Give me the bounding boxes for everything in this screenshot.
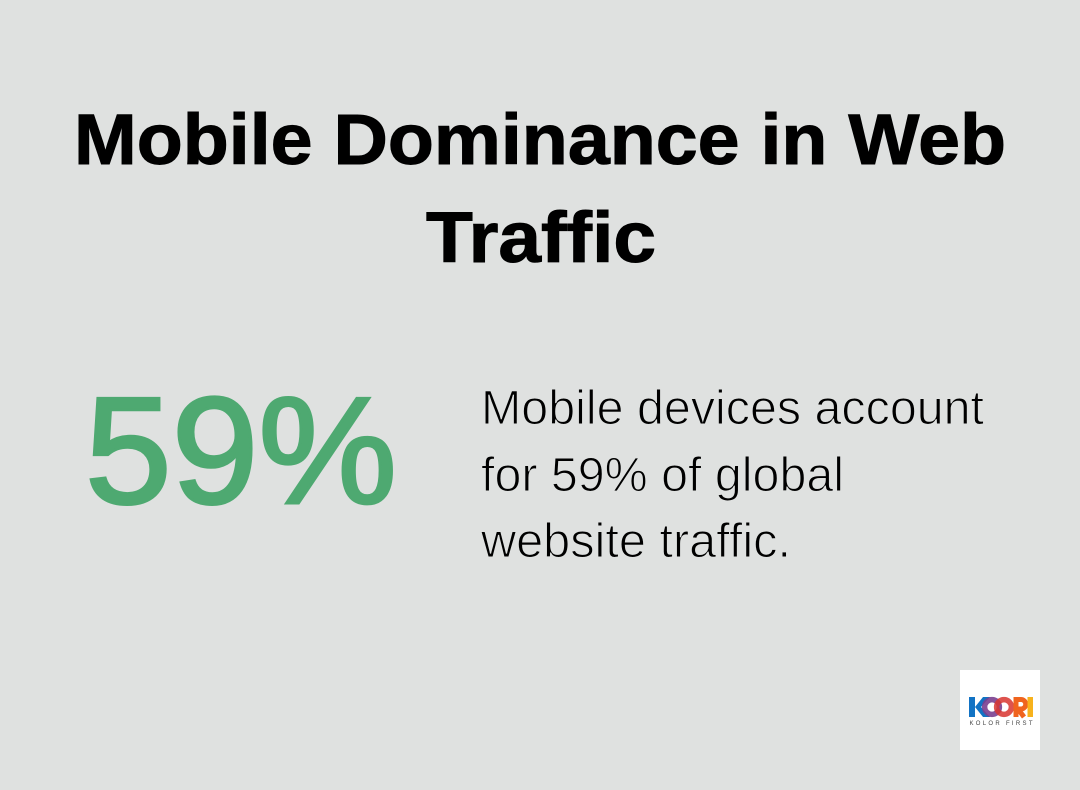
logo letter K (969, 697, 990, 717)
description text: for 59% of global (481, 449, 844, 502)
logo: Koori Kolor First (960, 670, 1040, 750)
logo letters O O (985, 700, 1011, 714)
big statistic: 59%: 59% (85, 366, 397, 536)
description text: Mobile devices account (481, 382, 984, 435)
description text (480, 382, 984, 568)
description text: website traffic. (480, 515, 791, 568)
logo tagline: KOLOR FIRST (970, 721, 1033, 727)
logo letter R (1016, 700, 1026, 717)
title (74, 101, 1006, 278)
title: Mobile Dominance in Web (74, 101, 1006, 180)
logo numeral 1 (1028, 697, 1033, 717)
title: Traffic (426, 199, 656, 278)
